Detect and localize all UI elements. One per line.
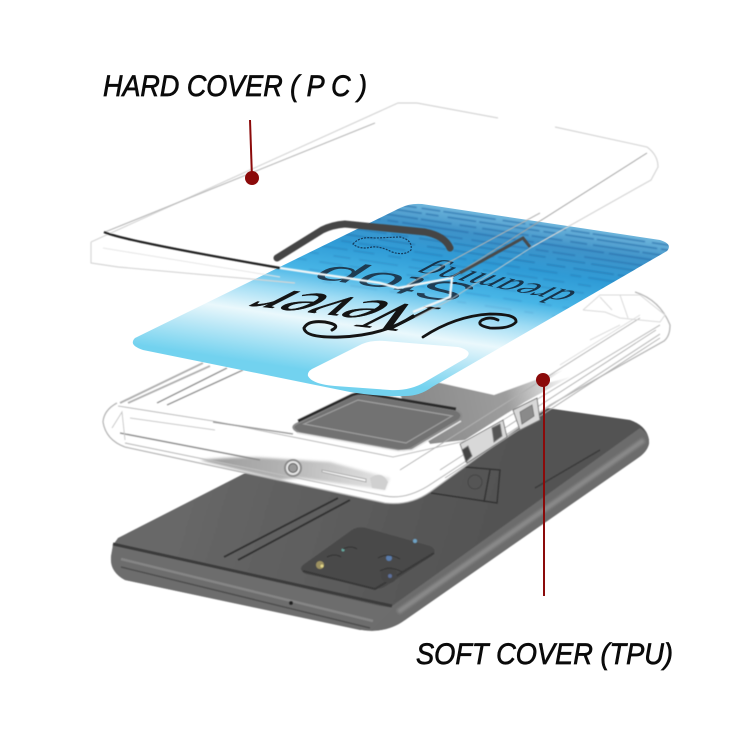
hard cover right dark edge <box>460 238 530 273</box>
camera cutout <box>293 394 461 450</box>
camera opening dark rim <box>277 224 450 258</box>
phone lower band <box>111 545 394 630</box>
kickstand marks <box>431 467 500 503</box>
case rim lines <box>103 292 670 504</box>
title: hard cover label: HARD COVER ( P C ) <box>103 70 367 103</box>
phone body <box>111 408 649 631</box>
camera module <box>301 527 435 589</box>
stripes on phone back <box>224 498 350 560</box>
title: soft cover label: SOFT COVER (TPU) <box>416 638 673 671</box>
pointer: soft cover <box>536 373 550 596</box>
soft cover TPU <box>103 240 670 504</box>
grey area seen through case <box>385 370 570 444</box>
hard cover PC <box>91 103 658 318</box>
printed card insert <box>133 190 677 396</box>
dotted heart <box>353 237 411 254</box>
white camera window on card <box>308 341 469 390</box>
side buttons <box>460 398 540 463</box>
phone seen through case bottom <box>200 457 390 490</box>
script text on card: Never <box>225 281 453 340</box>
translucent edge over card <box>280 268 452 312</box>
water texture <box>296 205 669 316</box>
flourish right of N <box>423 314 516 337</box>
script text on card: Stop <box>296 260 490 307</box>
hard cover dark edge line <box>104 232 280 268</box>
phone side band <box>362 428 649 631</box>
pointer: hard cover <box>245 120 259 185</box>
flourish left of N <box>304 316 413 337</box>
charging and mic openings <box>285 460 301 476</box>
script text on card <box>225 237 585 340</box>
exploded phone case diagram <box>90 74 672 670</box>
script text on card: dreaming <box>405 257 585 309</box>
